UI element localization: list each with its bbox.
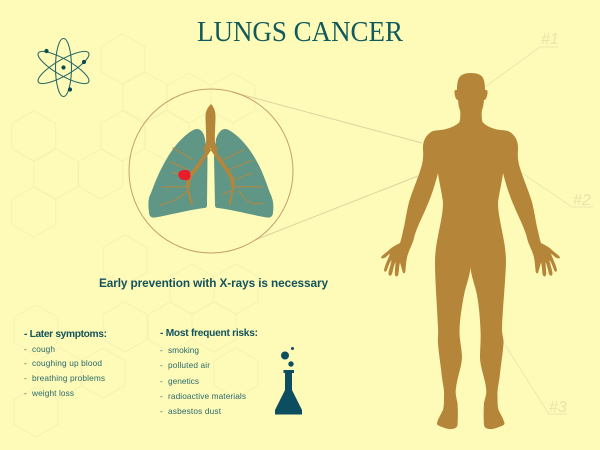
bronchi — [160, 148, 263, 205]
text block: most frequent risks: - — [160, 360, 163, 370]
connector lines from lungs to body — [232, 92, 422, 240]
callout: #1: #1 — [541, 31, 559, 48]
text block: most frequent risks: - Most frequent risks: — [160, 328, 258, 339]
text block: later symptoms — [24, 329, 107, 398]
heading: early prevention: Early prevention with X-rays is necessary — [99, 276, 328, 290]
human body silhouette — [381, 73, 560, 429]
text block: later symptoms: breathing problems — [32, 373, 105, 383]
text block: most frequent risks: - — [160, 391, 163, 401]
text block: most frequent risks — [160, 328, 258, 416]
trachea — [203, 104, 218, 153]
text block: most frequent risks: asbestos dust — [168, 406, 222, 416]
text block: most frequent risks: smoking — [168, 345, 199, 355]
text block: most frequent risks: - — [160, 345, 163, 355]
callout: #2: #2 — [573, 192, 591, 209]
text block: most frequent risks: - — [160, 376, 163, 386]
text block: later symptoms: - — [24, 388, 27, 398]
lungs magnifier — [129, 89, 293, 253]
text block: later symptoms: - — [24, 344, 27, 354]
text block: most frequent risks: polluted air — [168, 360, 210, 370]
text block: later symptoms: - — [24, 358, 27, 368]
text block: most frequent risks: radioactive materials — [168, 391, 246, 401]
text block: later symptoms: cough — [32, 344, 55, 354]
icon: flask — [275, 347, 302, 414]
text block: later symptoms: weight loss — [31, 388, 74, 398]
title: LUNGS CANCER — [197, 17, 403, 48]
icon: atom — [34, 38, 93, 96]
callout: #3: #3 — [549, 399, 567, 416]
text block: later symptoms: coughing up blood — [32, 358, 102, 368]
tumor — [178, 170, 190, 180]
text block: most frequent risks: genetics — [168, 376, 199, 386]
callout: #2 — [522, 173, 593, 209]
callout: #1 — [485, 31, 559, 87]
right lung — [214, 129, 273, 218]
text block: most frequent risks: - — [160, 406, 163, 416]
text block: later symptoms: - — [24, 373, 27, 383]
text block: later symptoms: - Later symptoms: — [24, 329, 107, 340]
left lung — [148, 129, 208, 218]
circle outline — [129, 89, 293, 253]
callout: #3 — [505, 345, 567, 416]
